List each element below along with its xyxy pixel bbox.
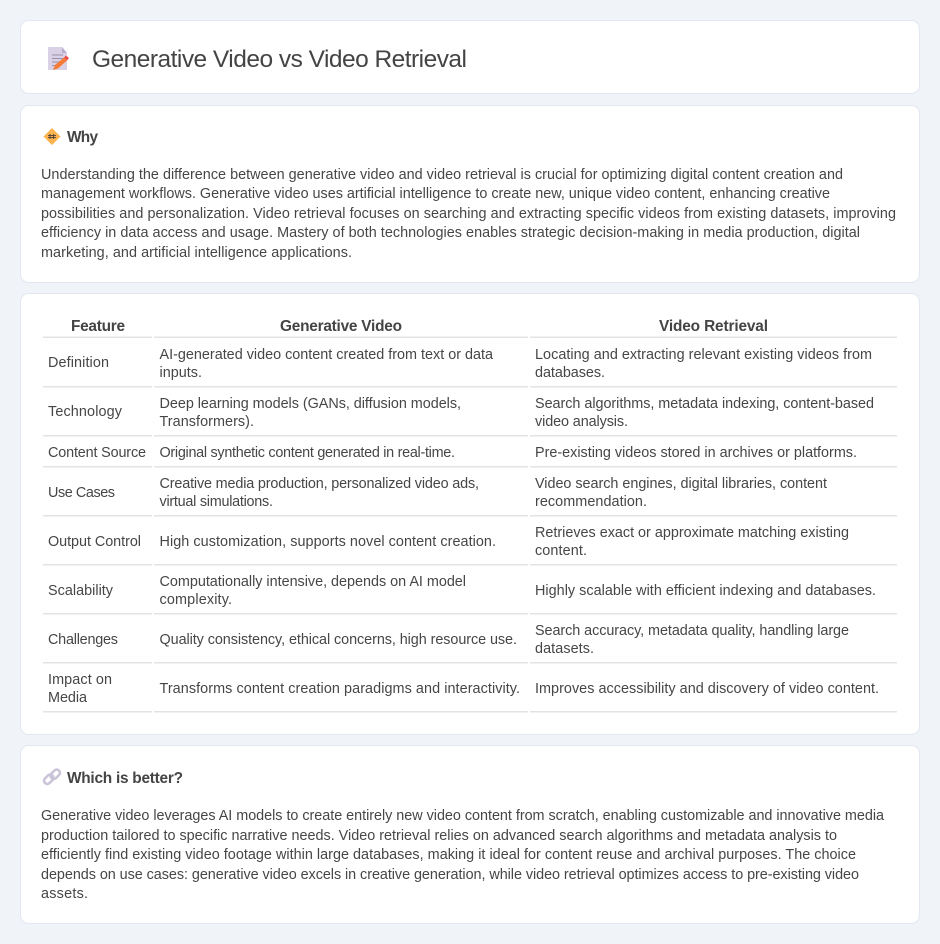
row: challenges: Challenges [48,632,118,648]
row: definition: Locating and extracting relevant existing videos from [535,347,872,363]
row: use cases [48,476,827,510]
row: output control: Output Control [48,534,141,550]
row: output control: Retrieves exact or approximate matching existing [535,525,849,541]
row: challenges: datasets. [535,641,594,657]
row: challenges: Quality consistency, ethical concerns, high resource use. [160,632,517,648]
row: challenges: Search accuracy, metadata quality, handling large [535,623,849,639]
text block: which is better: Generative video leverages AI models to create entirely new video content from scratch, enabling customizable and innovative media [41,808,884,824]
text block: why [41,167,896,261]
row: impact on media [48,672,879,706]
row: scalability: Computationally intensive, depends on AI model [160,574,466,590]
row: output control: content. [535,543,587,559]
text block: which is better: production tailored to specific narrative needs. Video retrieval relies on advanced search algorithms and metadata analysis to [41,828,837,844]
panel: header [20,20,920,94]
row: impact on media: Media [48,690,87,706]
row: use cases: Creative media production, personalized video ads, [160,476,479,492]
text block: which is better: efficiently find existing video footage within large databases, making it ideal for content reuse and archival purposes. The choice [41,847,856,863]
row: output control [48,525,849,559]
text block: why: efficiency in data access and usage. Mastery of both technologies enables strategic decision-making in media production, digital [41,225,860,241]
row: technology: Deep learning models (GANs, diffusion models, [160,396,461,412]
row: content source [48,445,857,461]
table header row: Video Retrieval [659,318,768,335]
row: technology: Search algorithms, metadata indexing, content-based [535,396,874,412]
table header row: Generative Video [280,318,402,335]
title: Generative Video vs Video Retrieval [92,46,467,73]
icon: warning diamond [44,128,60,145]
row: impact on media: Impact on [48,672,112,688]
icon: link [43,768,61,785]
panel: which is better [20,746,920,924]
panel: comparison table [20,294,920,734]
text block: which is better [41,808,884,902]
row: content source: Original synthetic content generated in real-time. [160,445,455,461]
row: definition: AI-generated video content created from text or data [160,347,493,363]
row: scalability: complexity. [160,592,232,608]
text block: why: marketing, and artificial intelligence applications. [41,245,352,261]
row: output control: High customization, supports novel content creation. [160,534,496,550]
icon: memo and pencil [48,47,69,70]
text block: why: possibilities and personalization. Video retrieval focuses on searching and extracting specific videos from existing datasets, improving [41,206,896,222]
row: scalability [48,574,876,608]
row: technology: Transformers). [160,414,254,430]
heading: why: Why [67,129,98,146]
row: use cases: Video search engines, digital libraries, content [535,476,827,492]
row: scalability: Highly scalable with efficient indexing and databases. [535,583,876,599]
row: use cases: virtual simulations. [160,494,273,510]
row: impact on media: Transforms content creation paradigms and interactivity. [160,681,520,697]
table header row [71,318,768,335]
text block: why: management workflows. Generative video uses artificial intelligence to create new, unique video content, enhancing creative [41,186,830,202]
row: content source: Pre-existing videos stored in archives or platforms. [535,445,857,461]
row: technology [48,396,874,430]
row: use cases: Use Cases [48,485,115,501]
text block: why: Understanding the difference between generative video and video retrieval is crucial for optimizing digital content creation and [41,167,843,183]
row: definition: inputs. [160,365,202,381]
row: content source: Content Source [48,445,146,461]
row: technology: Technology [48,404,123,420]
table header row: Feature [71,318,125,335]
heading: which is better: Which is better? [67,770,183,787]
text block: which is better: assets. [41,886,88,902]
row: challenges [48,623,849,657]
row: definition: databases. [535,365,605,381]
row: technology: video analysis. [535,414,628,430]
row: impact on media: Improves accessibility and discovery of video content. [535,681,879,697]
row: definition: Definition [48,355,109,371]
panel: why [20,106,920,282]
row: use cases: recommendation. [535,494,647,510]
row: scalability: Scalability [48,583,114,599]
text block: which is better: depends on use cases: generative video excels in creative generation, while video retrieval optimizes access to pre-existing video [41,867,859,883]
row: definition [48,347,872,381]
